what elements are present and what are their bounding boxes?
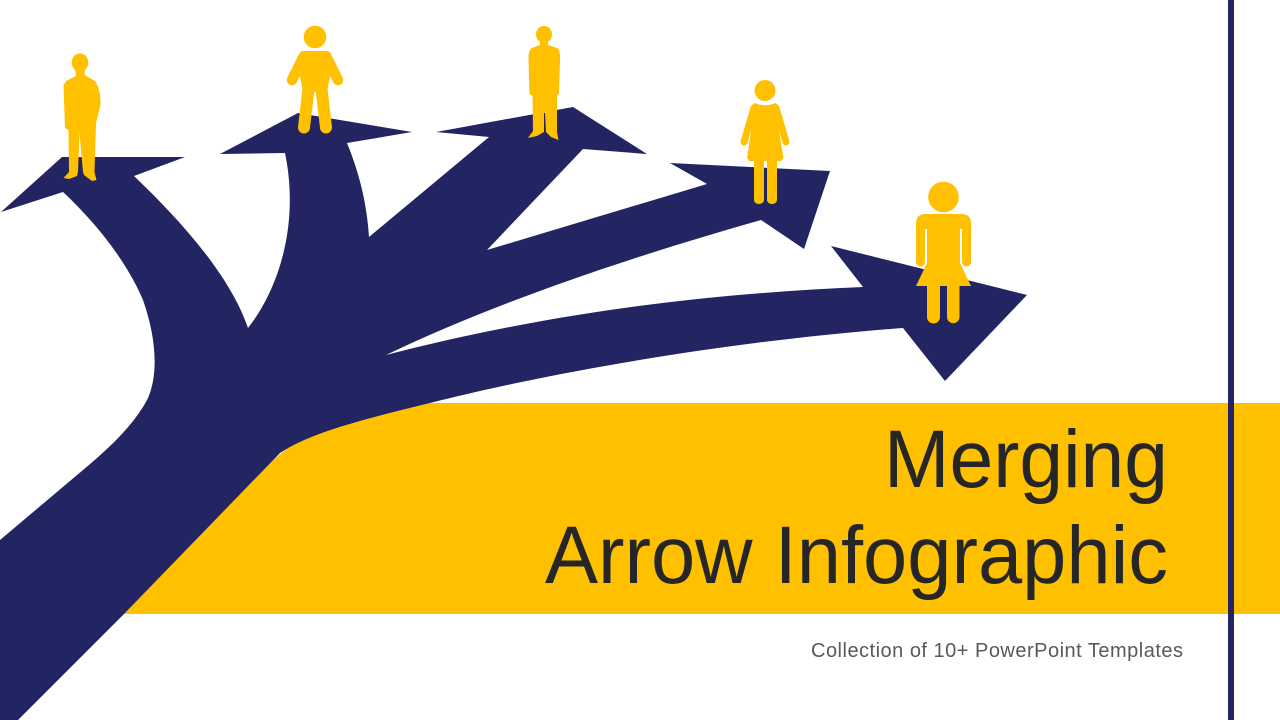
merging arrow: five branches bbox=[0, 107, 1027, 720]
person 2: pictogram man with arms out bbox=[292, 26, 338, 128]
vertical accent bar bbox=[1228, 0, 1234, 720]
person 4: pictogram woman in dress bbox=[744, 80, 786, 204]
title band bbox=[123, 403, 1280, 614]
title: Merging bbox=[884, 414, 1168, 505]
person 1: man in side profile bbox=[64, 54, 101, 181]
person 5: pictogram woman in skirt bbox=[916, 182, 971, 324]
person 3: standing man, front view bbox=[528, 26, 560, 140]
title: Arrow Infographic bbox=[545, 510, 1168, 601]
title bbox=[545, 414, 1168, 601]
subtitle: Collection of 10+ PowerPoint Templates bbox=[811, 640, 1183, 662]
